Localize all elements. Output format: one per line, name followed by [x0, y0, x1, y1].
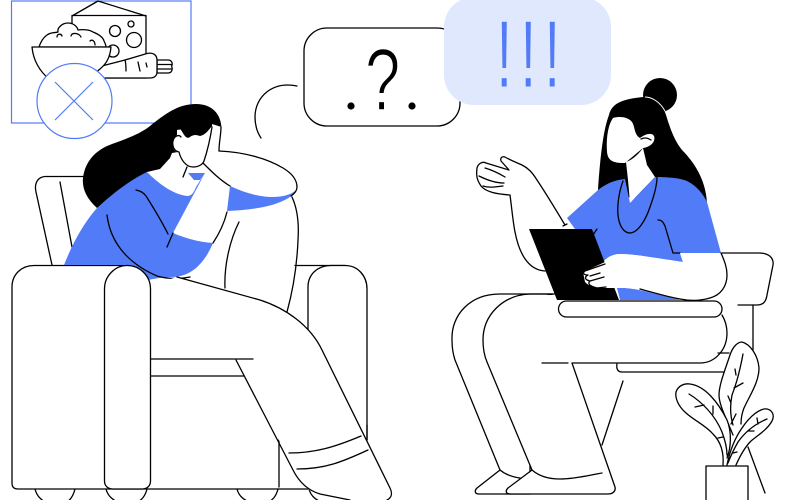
icon: cross circle	[37, 64, 112, 138]
icon: carrot	[94, 53, 172, 78]
shirt	[567, 177, 721, 262]
armchair front arm	[104, 266, 392, 500]
face and neck	[607, 117, 655, 203]
legs	[452, 294, 553, 494]
far leg and torso	[225, 190, 298, 312]
arm	[173, 151, 297, 243]
panel: forbidden foods	[12, 1, 191, 138]
lap board	[558, 301, 722, 317]
armchair	[12, 176, 367, 500]
speech bubble: exclamation: !	[544, 0, 561, 107]
leaf: left	[676, 384, 730, 465]
left arm	[477, 157, 565, 271]
speech bubble: question: ?	[365, 32, 400, 130]
icon: cheese	[72, 1, 146, 78]
hair	[643, 78, 677, 112]
chair	[602, 253, 773, 493]
shirt sleeve	[227, 186, 296, 211]
speech bubble: exclamation	[444, 0, 611, 107]
right arm	[583, 253, 727, 301]
leaf: centre	[719, 342, 759, 435]
nurse figure	[452, 78, 727, 494]
shirt lower strip	[617, 288, 680, 300]
potted plant	[676, 342, 773, 500]
clipboard	[529, 229, 619, 300]
speech bubble: exclamation: !	[496, 0, 513, 107]
icon: bowl of rice	[32, 23, 111, 90]
pot	[706, 466, 748, 500]
stethoscope	[618, 177, 657, 233]
arm outlines	[219, 151, 297, 196]
speech bubble: exclamation: !	[520, 0, 537, 107]
leaf: right	[727, 409, 773, 465]
chair legs	[35, 489, 321, 500]
shirt	[64, 172, 213, 280]
patient figure	[64, 104, 298, 312]
face	[173, 124, 222, 167]
hair	[83, 104, 222, 208]
speech bubble: question	[255, 28, 460, 138]
